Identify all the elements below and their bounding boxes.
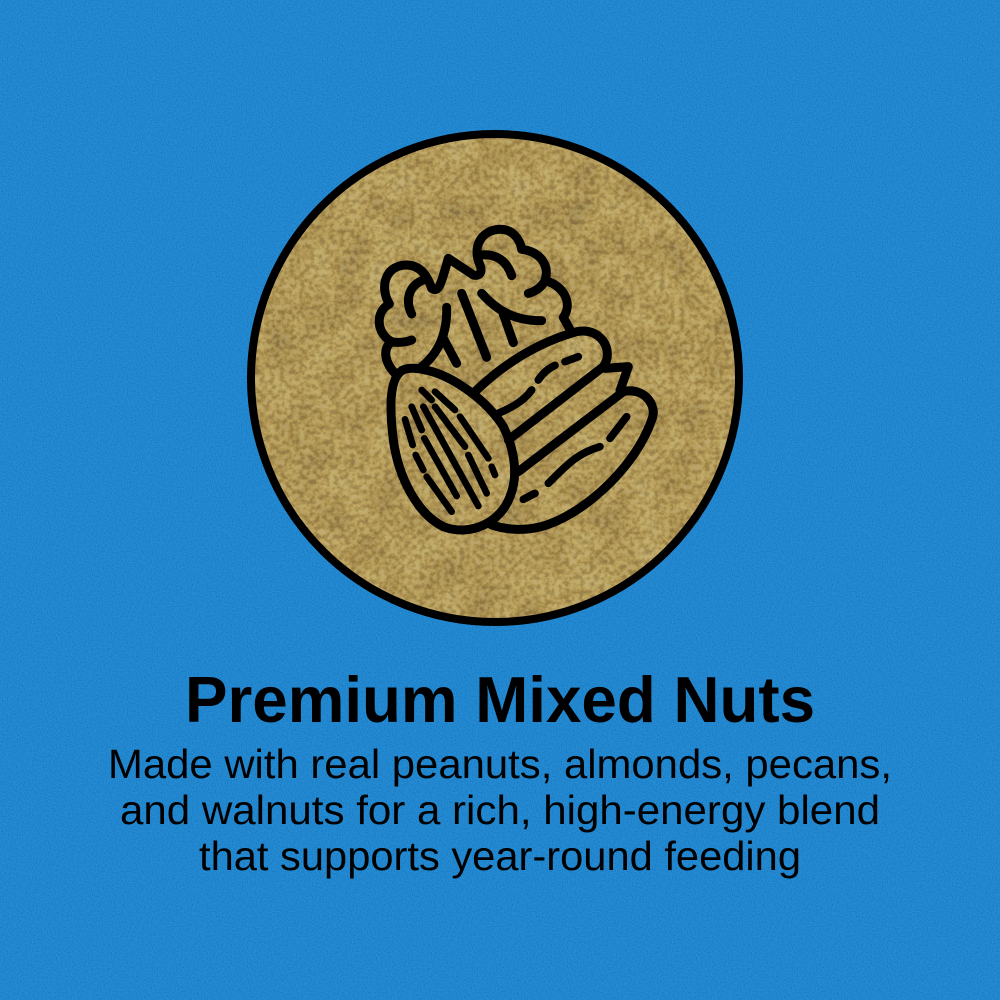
icon: pecans [473,331,653,529]
text block: description: and walnuts for a rich, high-energy blend [120,787,880,833]
title: Premium Mixed Nuts [185,663,815,736]
icon: almond [391,368,515,530]
text block: description: that supports year-round feeding [199,833,801,879]
text block: description [108,741,892,879]
panel: textured circle [251,134,739,622]
icon: mixed nuts [379,229,653,530]
text block: description: Made with real peanuts, almonds, pecans, [108,741,892,787]
icon: walnut [379,229,571,373]
